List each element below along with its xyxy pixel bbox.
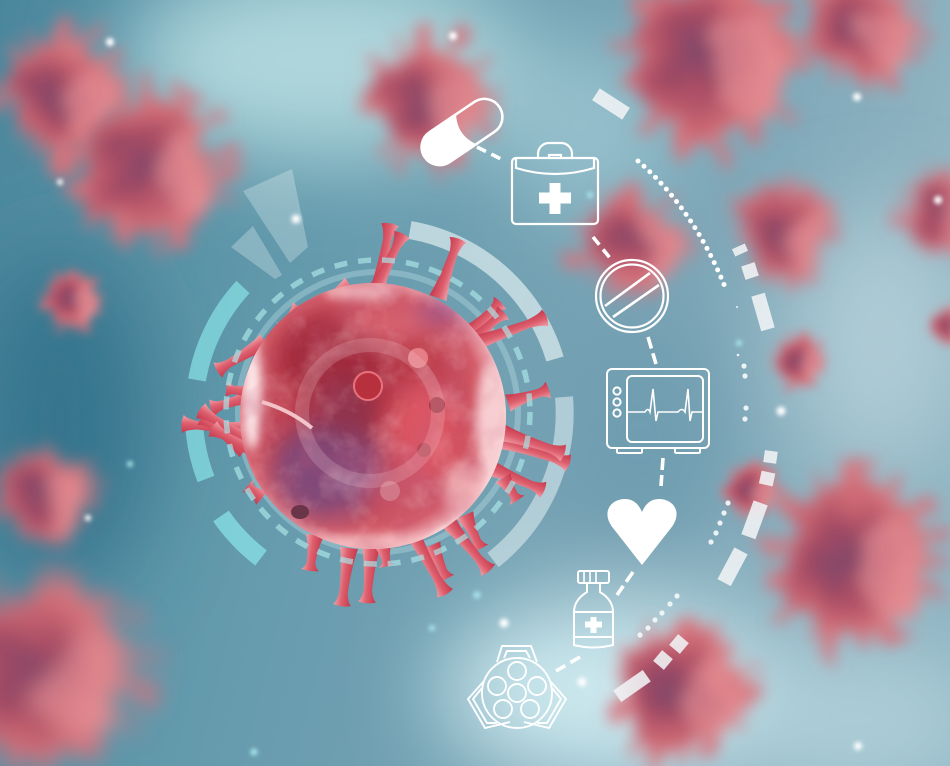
icon: solid heart — [607, 499, 677, 565]
icon: tablet in circle — [596, 260, 668, 332]
main virus: spikes — [181, 222, 573, 608]
decorative wedges top-left of main virus — [231, 169, 308, 279]
icon: medical kit — [512, 143, 598, 224]
main virus: segmented rings behind — [194, 230, 565, 560]
icon: medicine bottle — [574, 571, 613, 648]
main virus: translucent rings overlay — [226, 260, 530, 564]
icon: heart monitor — [607, 369, 709, 453]
icon: revolver chamber — [468, 646, 566, 728]
icon: pill capsule — [415, 92, 509, 172]
connector dashes between treatment icons — [477, 147, 663, 671]
main virus: sphere body — [240, 283, 508, 555]
dotted and segmented outer arc — [592, 88, 778, 702]
main virus: surface craters — [262, 348, 445, 519]
